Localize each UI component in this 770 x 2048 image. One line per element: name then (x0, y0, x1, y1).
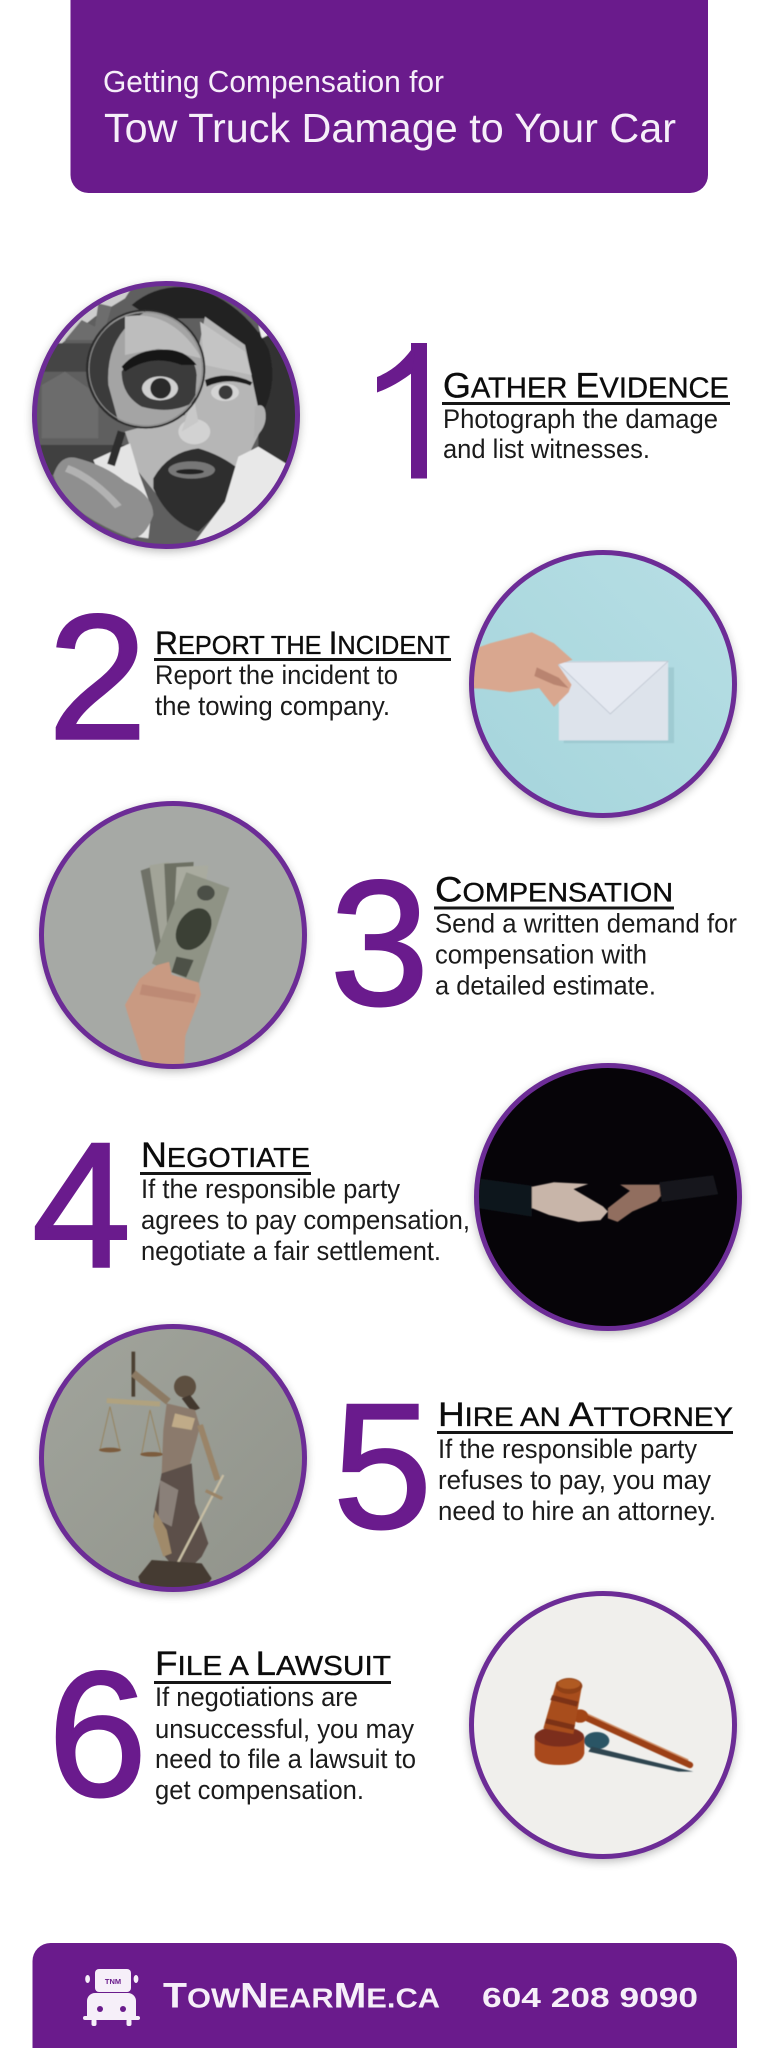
body text: get compensation. (155, 1775, 364, 1805)
photo: man with magnifying glass (25, 275, 310, 560)
body text: Photograph the damage (443, 404, 718, 434)
title: Gather Evidence: GATHER EVIDENCE (443, 366, 729, 406)
body text: the towing company. (155, 691, 390, 721)
number 4: 4 (32, 1106, 131, 1304)
body text: If the responsible party (438, 1434, 698, 1464)
title: Report the Incident: REPORT THE INCIDENT (155, 625, 450, 661)
title: File a Lawsuit: FILE A LAWSUIT (155, 1645, 391, 1683)
step 5 panel (30, 1315, 733, 1605)
heading line: Tow Truck Damage to Your Car: Tow Truck Damage to Your Car (104, 105, 676, 151)
body text (435, 908, 737, 1000)
body text: a detailed estimate. (435, 970, 656, 1000)
photo: hand holding envelope (460, 540, 750, 830)
photo: hand holding cash (40, 802, 306, 1071)
photo: two hands reaching on black (475, 1064, 741, 1333)
header banner (70, 0, 708, 193)
body text: Send a written demand for (435, 908, 737, 938)
body text: If negotiations are (155, 1682, 358, 1712)
phone number: 604 208 9090 (482, 1982, 698, 2013)
body text: need to hire an attorney. (438, 1496, 716, 1526)
body text: If the responsible party (141, 1174, 401, 1204)
footer banner (32, 1943, 737, 2048)
number 1 (377, 343, 427, 478)
body text (438, 1434, 716, 1526)
body text: unsuccessful, you may (155, 1714, 415, 1744)
body text (443, 404, 718, 464)
body text: need to file a lawsuit to (155, 1744, 416, 1774)
step 6 panel (48, 1592, 736, 1861)
number 1: 1 (366, 318, 465, 516)
title: Compensation: COMPENSATION (435, 870, 673, 910)
body text: compensation with (435, 940, 647, 970)
body text: negotiate a fair settlement. (141, 1236, 441, 1266)
body text: and list witnesses. (443, 434, 650, 464)
body text (155, 1682, 416, 1805)
number 5: 5 (333, 1366, 432, 1566)
photo: lady justice statue (30, 1315, 320, 1605)
step 3 panel (40, 802, 737, 1071)
body text (155, 660, 398, 721)
title: Hire an Attorney: HIRE AN ATTORNEY (438, 1396, 733, 1434)
photo: wooden gavel (470, 1592, 736, 1861)
brand name: TOWNEARME.CA (163, 1976, 440, 2016)
number 3: 3 (330, 844, 429, 1042)
step 4 panel (32, 1064, 741, 1333)
body text: Report the incident to (155, 660, 398, 690)
icon: tow truck logo: TNM (105, 1977, 121, 1986)
step 2 panel (48, 540, 750, 830)
body text: refuses to pay, you may (438, 1465, 712, 1495)
step 1 panel (25, 275, 730, 560)
number 2: 2 (48, 578, 147, 776)
heading line: Getting Compensation for: Getting Compensation for (103, 64, 444, 99)
icon: tow truck logo (83, 1969, 140, 2026)
number 6: 6 (48, 1634, 147, 1834)
title: Negotiate: NEGOTIATE (141, 1136, 310, 1175)
body text (141, 1174, 470, 1266)
body text: agrees to pay compensation, (141, 1205, 470, 1235)
